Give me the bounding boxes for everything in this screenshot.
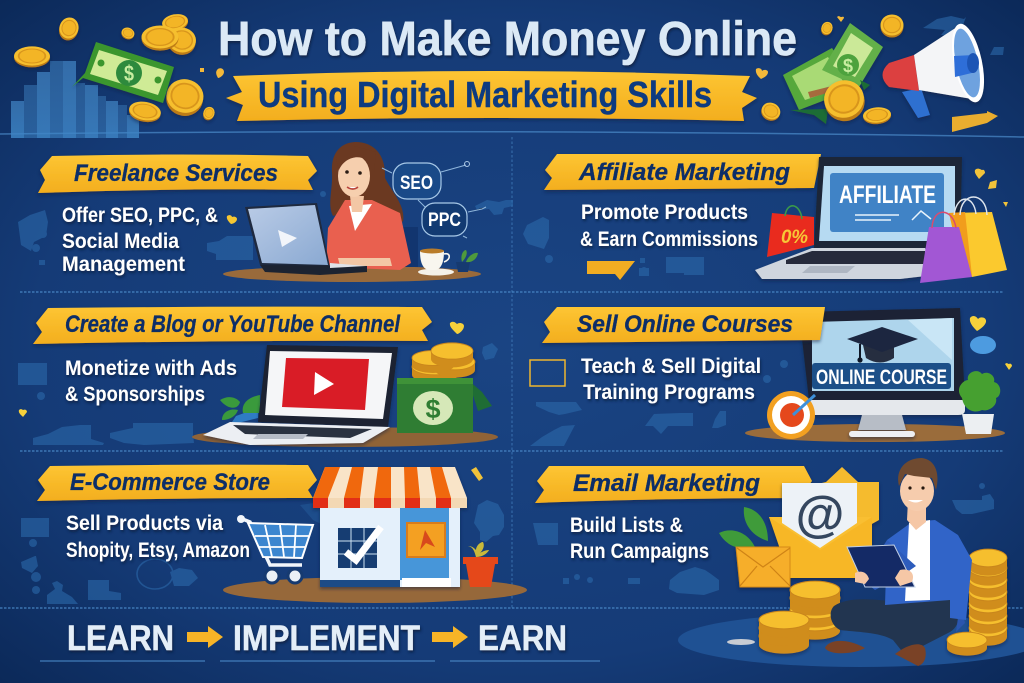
cash bundle (397, 378, 492, 433)
monitor: ONLINE COURSE (816, 366, 947, 389)
envelopes (736, 467, 879, 587)
icons: heart and chat (970, 316, 1012, 370)
table (192, 427, 498, 447)
text: freelance description: Social Media (62, 230, 179, 253)
cash bundle: $ (425, 394, 441, 424)
coin stack (412, 343, 475, 383)
plant (959, 371, 1000, 434)
text: freelance description (62, 204, 218, 276)
envelopes: @ (796, 486, 844, 542)
banner: e-commerce: E-Commerce Store (70, 469, 270, 496)
text: courses description: Training Programs (583, 381, 755, 404)
text: blog description: Monetize with Ads (65, 357, 237, 380)
shopping bag red (767, 206, 814, 257)
shop (313, 467, 467, 587)
title: How to Make Money Online (218, 13, 797, 66)
woman at laptop (326, 142, 418, 270)
banner: courses: Sell Online Courses (577, 311, 793, 338)
text: email description (570, 514, 709, 563)
table (223, 577, 527, 603)
text: e-commerce description: Shopity, Etsy, Amazon (66, 539, 250, 562)
banner: blog (33, 307, 432, 344)
money bill left: $ (124, 61, 134, 86)
text: e-commerce description (66, 512, 250, 562)
text: e-commerce description: Sell Products via (66, 512, 223, 535)
floor (678, 613, 1024, 667)
banner: blog: Create a Blog or YouTube Channel (65, 311, 401, 338)
bubble: SEO (382, 162, 470, 210)
footer slogan (67, 619, 567, 658)
banner: freelance: Freelance Services (74, 160, 278, 187)
plant (456, 250, 478, 272)
word: earn: EARN (478, 619, 567, 658)
text: blog description (65, 357, 237, 406)
shopping bag purple (920, 212, 972, 283)
plant pot (463, 542, 498, 587)
text: freelance description: Management (62, 253, 185, 276)
bar chart (11, 61, 139, 138)
bubble: SEO: SEO (400, 173, 433, 194)
header (11, 12, 998, 138)
banner: e-commerce (37, 465, 317, 501)
panel: email marketing (535, 458, 1024, 667)
coins left (14, 12, 216, 124)
laptop with video (203, 345, 398, 445)
arrow (187, 626, 223, 648)
panel: affiliate marketing (544, 154, 1008, 283)
icon: heart (227, 215, 237, 224)
awning (313, 467, 467, 508)
panel: e-commerce store (37, 465, 527, 603)
arrow right (952, 111, 998, 132)
small coin on floor (727, 639, 755, 645)
hearts and sparkles (200, 16, 844, 79)
text: blog description: & Sponsorships (65, 383, 205, 406)
arrow (432, 626, 468, 648)
laptop (755, 157, 962, 279)
text: email description: Build Lists & (570, 514, 683, 537)
money bills right: $ (843, 56, 853, 76)
banner: email (535, 466, 812, 503)
icon: megaphone (882, 21, 990, 118)
shopping bag red: 0% (781, 227, 808, 248)
icon: shopping cart (237, 515, 313, 583)
arrow yellow (587, 261, 635, 280)
icon: target (767, 391, 815, 439)
coins right (758, 14, 904, 126)
word: implement: IMPLEMENT (233, 619, 420, 658)
text: email description: Run Campaigns (570, 540, 709, 563)
bubble: PPC (422, 203, 486, 238)
panel: blog or youtube (19, 307, 498, 447)
icon: hearts (19, 322, 464, 417)
plant (220, 395, 260, 425)
table (223, 266, 481, 282)
banner: freelance (38, 154, 317, 193)
text: courses description (581, 355, 761, 404)
text: freelance description: Offer SEO, PPC, & (62, 204, 218, 227)
money bill left (72, 42, 174, 103)
leaves (719, 507, 768, 548)
graduation cap (847, 327, 918, 363)
icon: tag (471, 467, 483, 481)
icon: board (530, 360, 565, 386)
text: affiliate description: & Earn Commissions (580, 228, 758, 251)
icons small (975, 169, 1008, 207)
monitor (799, 308, 965, 437)
word: learn: LEARN (67, 619, 174, 658)
table (745, 424, 1005, 442)
text: affiliate description (580, 201, 758, 251)
text: courses description: Teach & Sell Digital (581, 355, 761, 378)
text: affiliate description: Promote Products (581, 201, 748, 224)
banner: courses (542, 307, 825, 343)
shopping bag yellow (949, 197, 1007, 277)
dividers (0, 132, 1024, 661)
money bills right (783, 23, 883, 124)
subtitle ribbon: Using Digital Marketing Skills (258, 74, 712, 115)
panel: sell online courses (530, 307, 1012, 442)
bubble: PPC: PPC (428, 210, 461, 231)
laptop: AFFILIATE (839, 181, 936, 209)
coin stacks (759, 549, 1007, 656)
banner: affiliate: Affiliate Marketing (578, 159, 790, 186)
laptop (245, 203, 367, 275)
panel: freelance services (38, 142, 486, 282)
coffee cup (418, 248, 454, 276)
man with tablet (825, 458, 972, 666)
banner: affiliate (544, 154, 821, 190)
banner: email: Email Marketing (573, 470, 760, 497)
